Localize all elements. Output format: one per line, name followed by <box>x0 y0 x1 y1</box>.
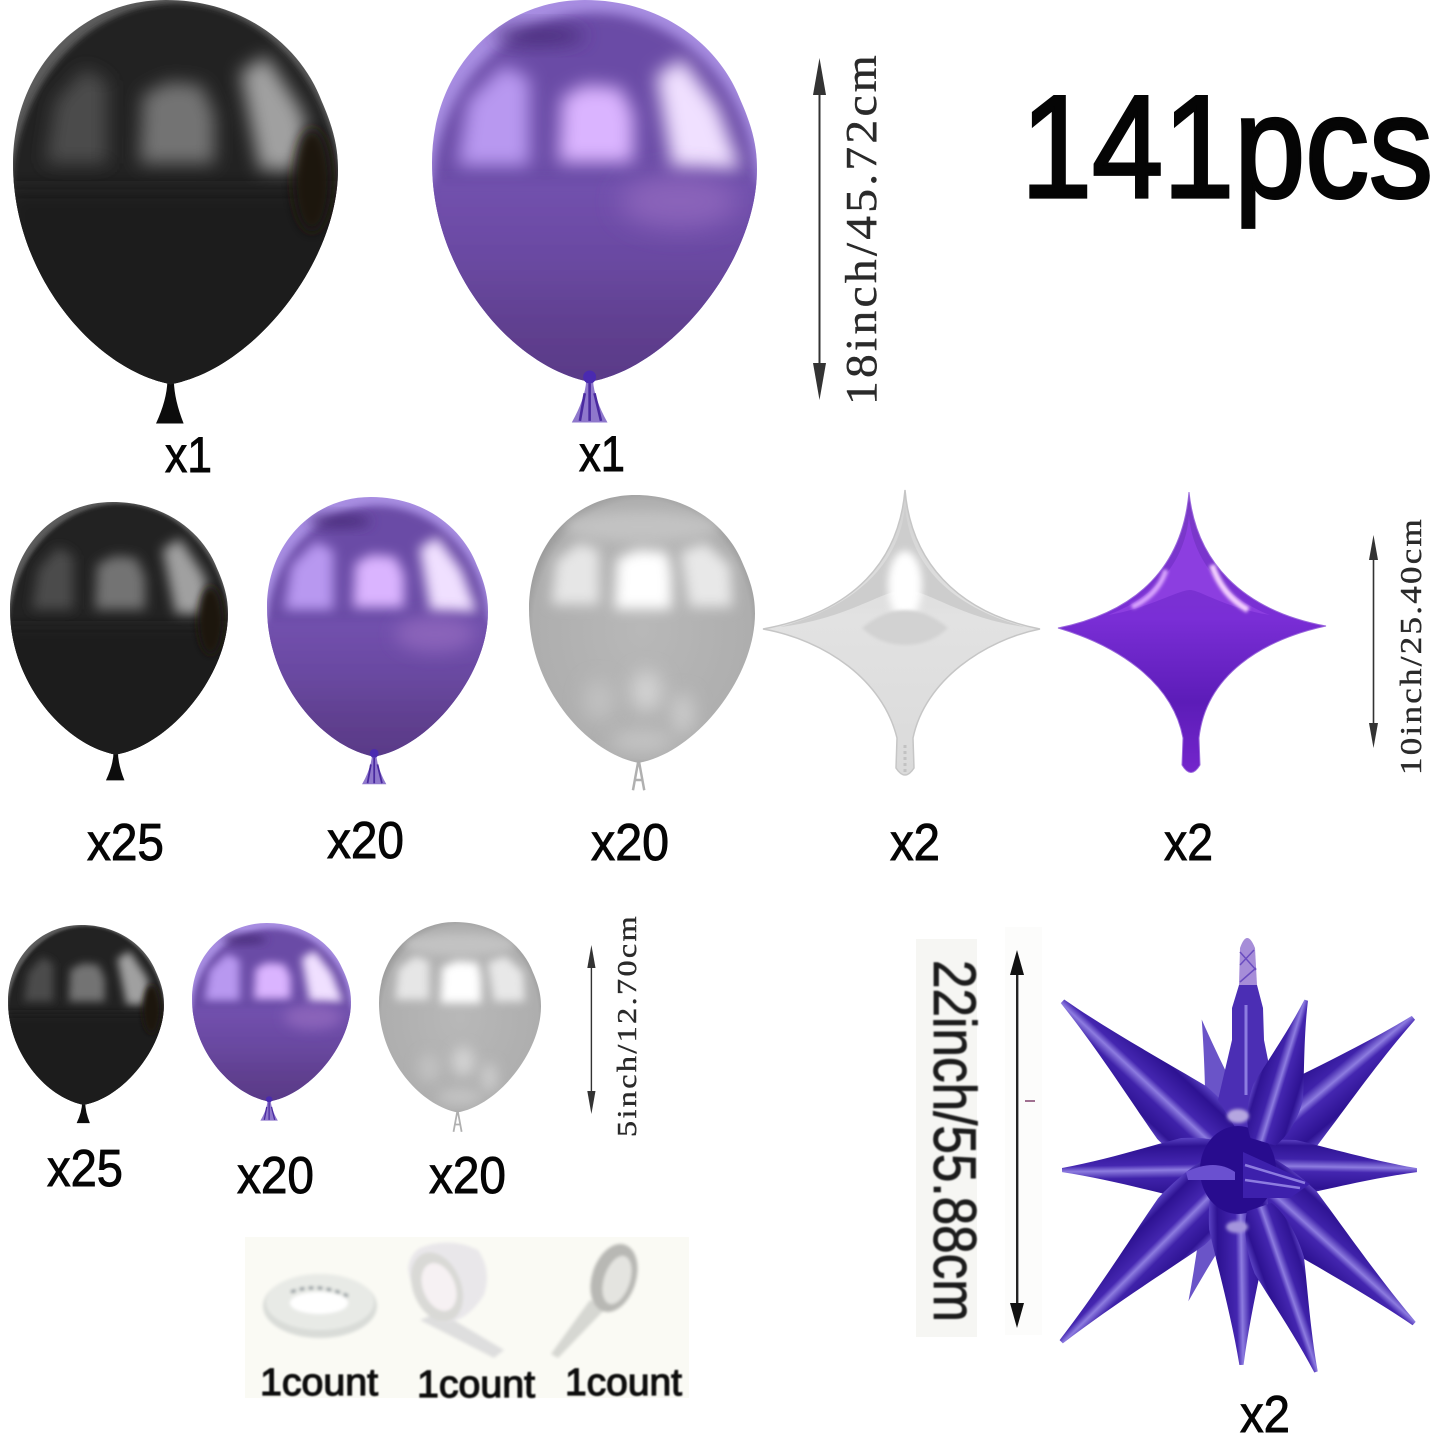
dimension: 22 inch: 22inch/55.88cm <box>921 960 988 1322</box>
label: x1 black: x1 <box>165 427 212 483</box>
label: 1count strip: 1count <box>565 1362 682 1404</box>
small silver balloon <box>376 919 544 1132</box>
dimension: 18 inch: 18inch/45.72cm <box>837 52 886 405</box>
purple four-point star balloon <box>1058 492 1326 772</box>
dimension: 5 inch: 5inch/12.70cm <box>612 914 642 1137</box>
silver four-point star balloon <box>763 490 1040 775</box>
label: x2 silver star: x2 <box>890 814 940 872</box>
panel: accessories <box>245 1237 689 1406</box>
arrow: 5 inch <box>587 945 596 1114</box>
label: x20 small silver: x20 <box>429 1147 506 1205</box>
large black balloon <box>6 0 344 423</box>
medium purple balloon <box>263 493 492 784</box>
arrow: 22 inch <box>1005 927 1042 1335</box>
label: x2 purple star: x2 <box>1164 814 1213 872</box>
arrow: 10 inch <box>1369 535 1378 748</box>
top valve <box>1218 938 1276 1135</box>
icon: glue dot roll <box>401 1242 504 1358</box>
small purple balloon <box>189 920 354 1121</box>
label: x25 medium black: x25 <box>87 814 164 872</box>
dimension: 10 inch: 10inch/25.40cm <box>1393 517 1428 775</box>
purple starburst balloon <box>1038 938 1437 1380</box>
label: x1 purple: x1 <box>579 426 625 482</box>
label: x20 medium silver: x20 <box>591 814 669 872</box>
large purple balloon <box>426 0 764 422</box>
label: 1count ribbon: 1count <box>260 1362 378 1404</box>
small black balloon <box>5 922 167 1123</box>
arrow: 18 inch <box>813 58 826 400</box>
icon: ribbon roll <box>263 1274 377 1338</box>
label: x20 small purple: x20 <box>237 1147 314 1205</box>
icon: balloon arch strip <box>551 1238 646 1358</box>
medium silver balloon <box>524 490 760 790</box>
label: 1count glue: 1count <box>417 1364 535 1406</box>
label: x20 medium purple: x20 <box>327 812 404 870</box>
medium black balloon <box>6 498 232 780</box>
label: x2 starburst: x2 <box>1240 1386 1290 1444</box>
label: x25 small black: x25 <box>47 1140 123 1198</box>
